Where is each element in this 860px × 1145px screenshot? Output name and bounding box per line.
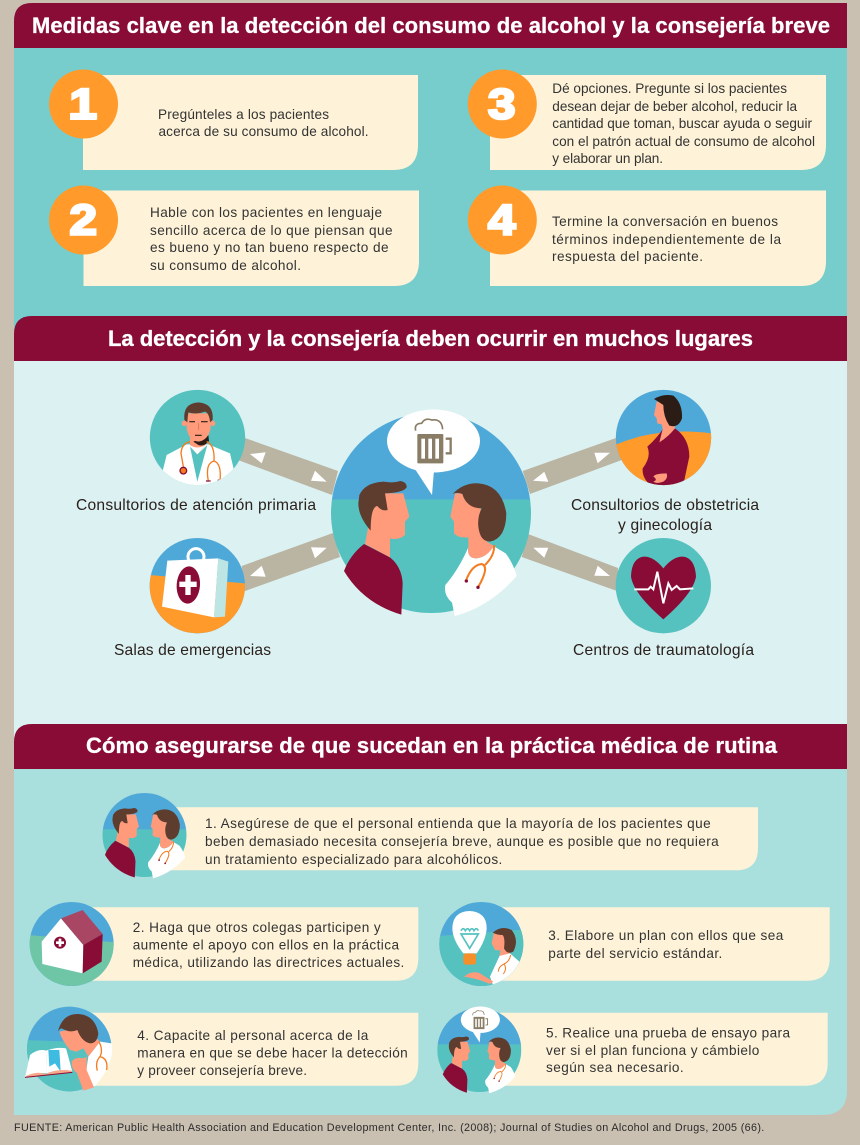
item 3 card: parte del servicio estándar. [548, 946, 722, 961]
step 1 card: Pregúnteles a los pacientes [158, 107, 329, 122]
arrow: emergency rooms [242, 533, 340, 591]
step 1 card: 1 [70, 81, 97, 129]
panel: settings [14, 316, 847, 740]
item 2 card: 2. Haga que otros colegas participen y [133, 920, 381, 935]
heading: settings [14, 316, 847, 361]
heading: key measures: Medidas clave en la detección del consumo de alcohol y la consejería breve [32, 13, 830, 38]
item 2 card: médica, utilizando las directrices actuales. [133, 955, 404, 970]
item 1 card: un tratamiento especializado para alcohólicos. [205, 852, 502, 867]
step 2 card [49, 186, 419, 286]
step 4 card [468, 186, 826, 286]
panel: routine practice [14, 724, 847, 1115]
step 1 card [49, 70, 418, 170]
icon: doctor [150, 390, 246, 486]
item 4 card: manera en que se debe hacer la detección [137, 1045, 408, 1060]
step 3 card: y elaborar un plan. [552, 151, 663, 166]
item 2 card: aumente el apoyo con ellos en la práctica [133, 937, 399, 952]
item 2 card [28, 902, 418, 987]
panel: key measures [14, 3, 847, 330]
icon: doctor reading a book [25, 1007, 117, 1097]
item 4 card [25, 1007, 418, 1097]
icon: first aid kit [150, 538, 245, 633]
heading: routine practice [14, 724, 847, 769]
item 5 card [437, 1007, 828, 1093]
arrow: primary care [238, 438, 338, 495]
step 4 card: Termine la conversación en buenos [552, 214, 778, 229]
step 2 card: es bueno y no tan bueno respecto de [150, 240, 388, 255]
step 2 card: Hable con los pacientes en lenguaje [150, 205, 382, 220]
step 3 card: Dé opciones. Pregunte si los pacientes [552, 81, 787, 96]
item 4 card: y proveer consejería breve. [137, 1063, 307, 1078]
step 4 card: 4 [488, 197, 516, 245]
label: obstetrics and gynecology [571, 497, 759, 534]
step 2 card: sencillo acerca de lo que piensan que [150, 223, 392, 238]
step 2 card: 2 [70, 197, 97, 245]
arrow: trauma centers [522, 534, 618, 591]
item 3 card: 3. Elabore un plan con ellos que sea [548, 928, 784, 943]
heading: key measures [14, 3, 847, 48]
item 5 card: ver si el plan funciona y cámbielo [546, 1043, 759, 1058]
step 1 card: acerca de su consumo de alcohol. [158, 124, 368, 139]
item 1 card [102, 793, 758, 878]
heading: routine practice: Cómo asegurarse de que sucedan en la práctica médica de rutina [86, 733, 778, 758]
source note: FUENTE: American Public Health Association and Education Development Center, Inc. (2008); Journal of Studies on Alcohol and Drugs, 2005 (66). [14, 1122, 764, 1134]
label: primary care: Consultorios de atención primaria [76, 497, 316, 514]
step 3 card: cantidad que toman, buscar ayuda o seguir [552, 116, 812, 131]
item 5 card: según sea necesario. [546, 1060, 684, 1075]
step 3 card [468, 70, 826, 170]
item 3 card [438, 902, 830, 987]
arrow: obstetrics [523, 438, 622, 494]
label: obstetrics and gynecology: y ginecología [618, 517, 712, 534]
icon: patient and doctor with beer bubble [437, 1007, 521, 1093]
step 2 card: su consumo de alcohol. [150, 258, 301, 273]
icon: light bulb and doctor [438, 902, 525, 987]
item 1 card: beben demasiado necesita consejería breve, aunque es posible que no requiera [205, 834, 719, 849]
icon: house with cross [28, 902, 115, 987]
label: emergency rooms: Salas de emergencias [114, 642, 271, 659]
item 5 card: 5. Realice una prueba de ensayo para [546, 1025, 790, 1040]
icon: heart with pulse [616, 538, 711, 633]
label: obstetrics and gynecology: Consultorios de obstetricia [571, 497, 759, 514]
step 3 card: con el patrón actual de consumo de alcohol [552, 134, 815, 149]
icon: patient and doctor [102, 793, 186, 878]
step 3 card: desean dejar de beber alcohol, reducir la [552, 99, 797, 114]
heading: settings: La detección y la consejería deben ocurrir en muchos lugares [108, 326, 753, 351]
step 4 card: respuesta del paciente. [552, 249, 703, 264]
icon: patient and doctor talking about alcohol [331, 410, 531, 616]
step 4 card: términos independientemente de la [552, 232, 781, 247]
step 3 card: 3 [488, 81, 516, 129]
item 1 card: 1. Asegúrese de que el personal entienda que la mayoría de los pacientes que [205, 816, 711, 831]
item 4 card: 4. Capacite al personal acerca de la [137, 1028, 369, 1043]
label: trauma centers: Centros de traumatología [573, 642, 754, 659]
icon: pregnant woman [615, 390, 712, 488]
